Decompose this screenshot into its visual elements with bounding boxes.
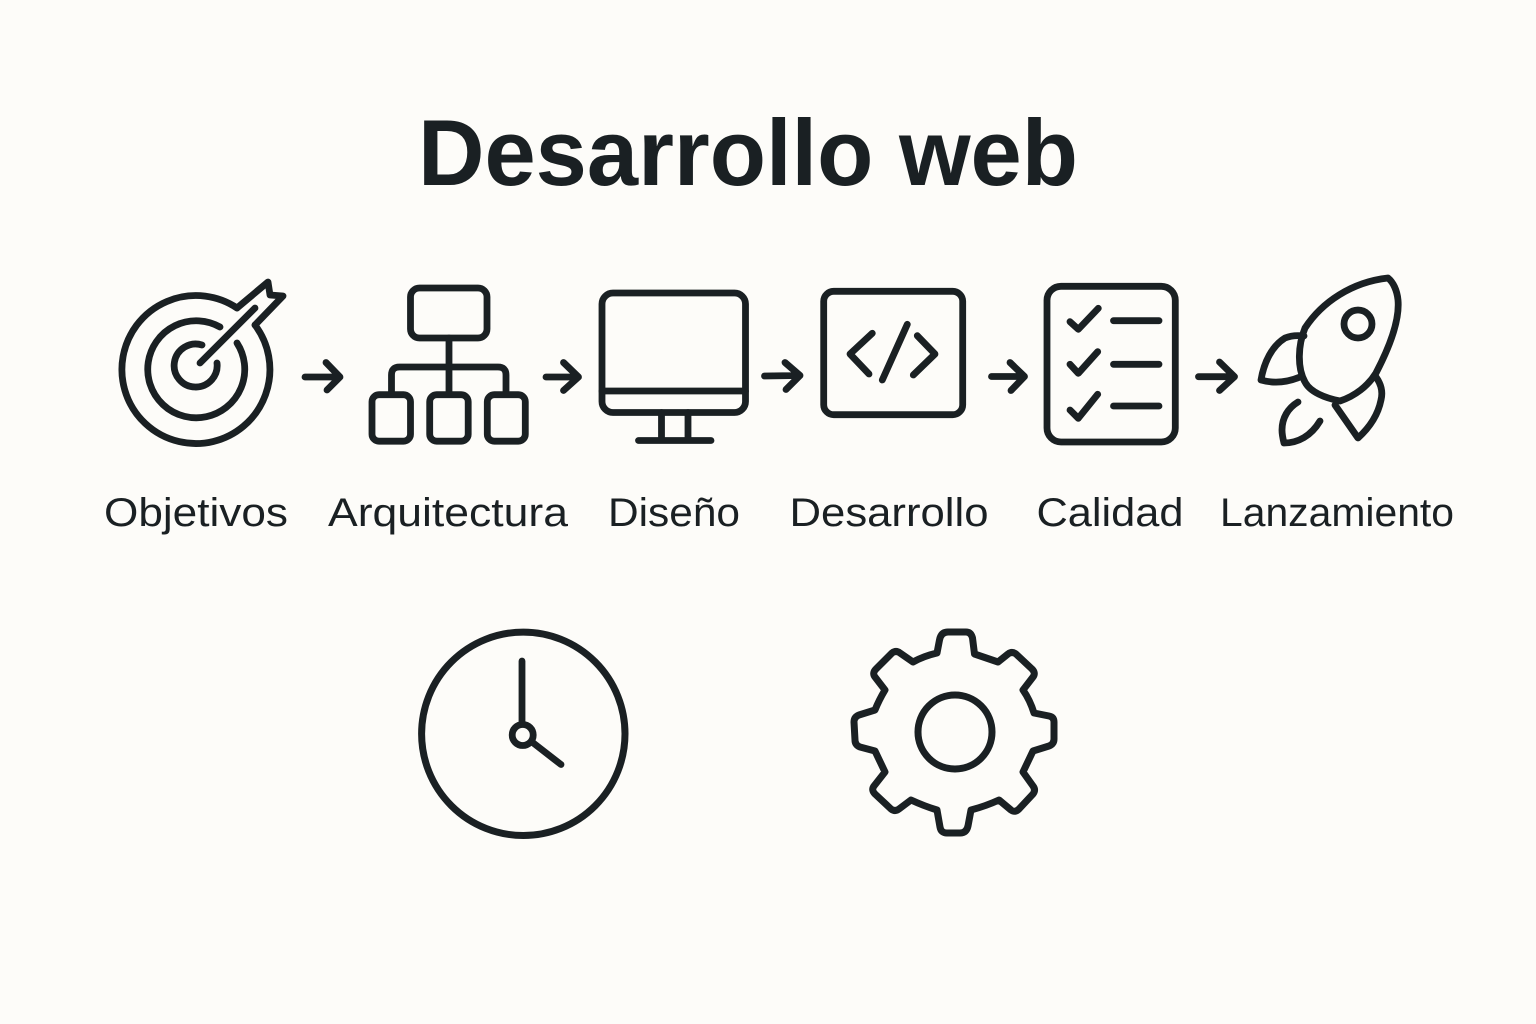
arrow 5 [1198,362,1234,390]
icon: sitemap hierarchy [372,288,525,441]
icon: checklist [1047,286,1175,442]
label: Objetivos: Objetivos [104,491,288,535]
icon: rocket [1261,278,1398,443]
icon: code window [824,291,963,415]
icon: gear [854,632,1054,833]
arrow 3 [764,362,800,390]
label: Desarrollo: Desarrollo [790,491,988,535]
title: Desarrollo web [418,100,1078,205]
label: Calidad: Calidad [1036,491,1184,535]
label: Diseño: Diseño [608,491,740,535]
arrow 2 [546,362,578,390]
icon: target with arrow [122,282,283,444]
arrow 1 [305,362,340,390]
label: Arquitectura: Arquitectura [328,491,569,535]
icon: clock [422,632,625,836]
icon: desktop monitor [602,293,746,440]
label: Lanzamiento: Lanzamiento [1220,491,1454,535]
arrow 4 [992,362,1024,390]
